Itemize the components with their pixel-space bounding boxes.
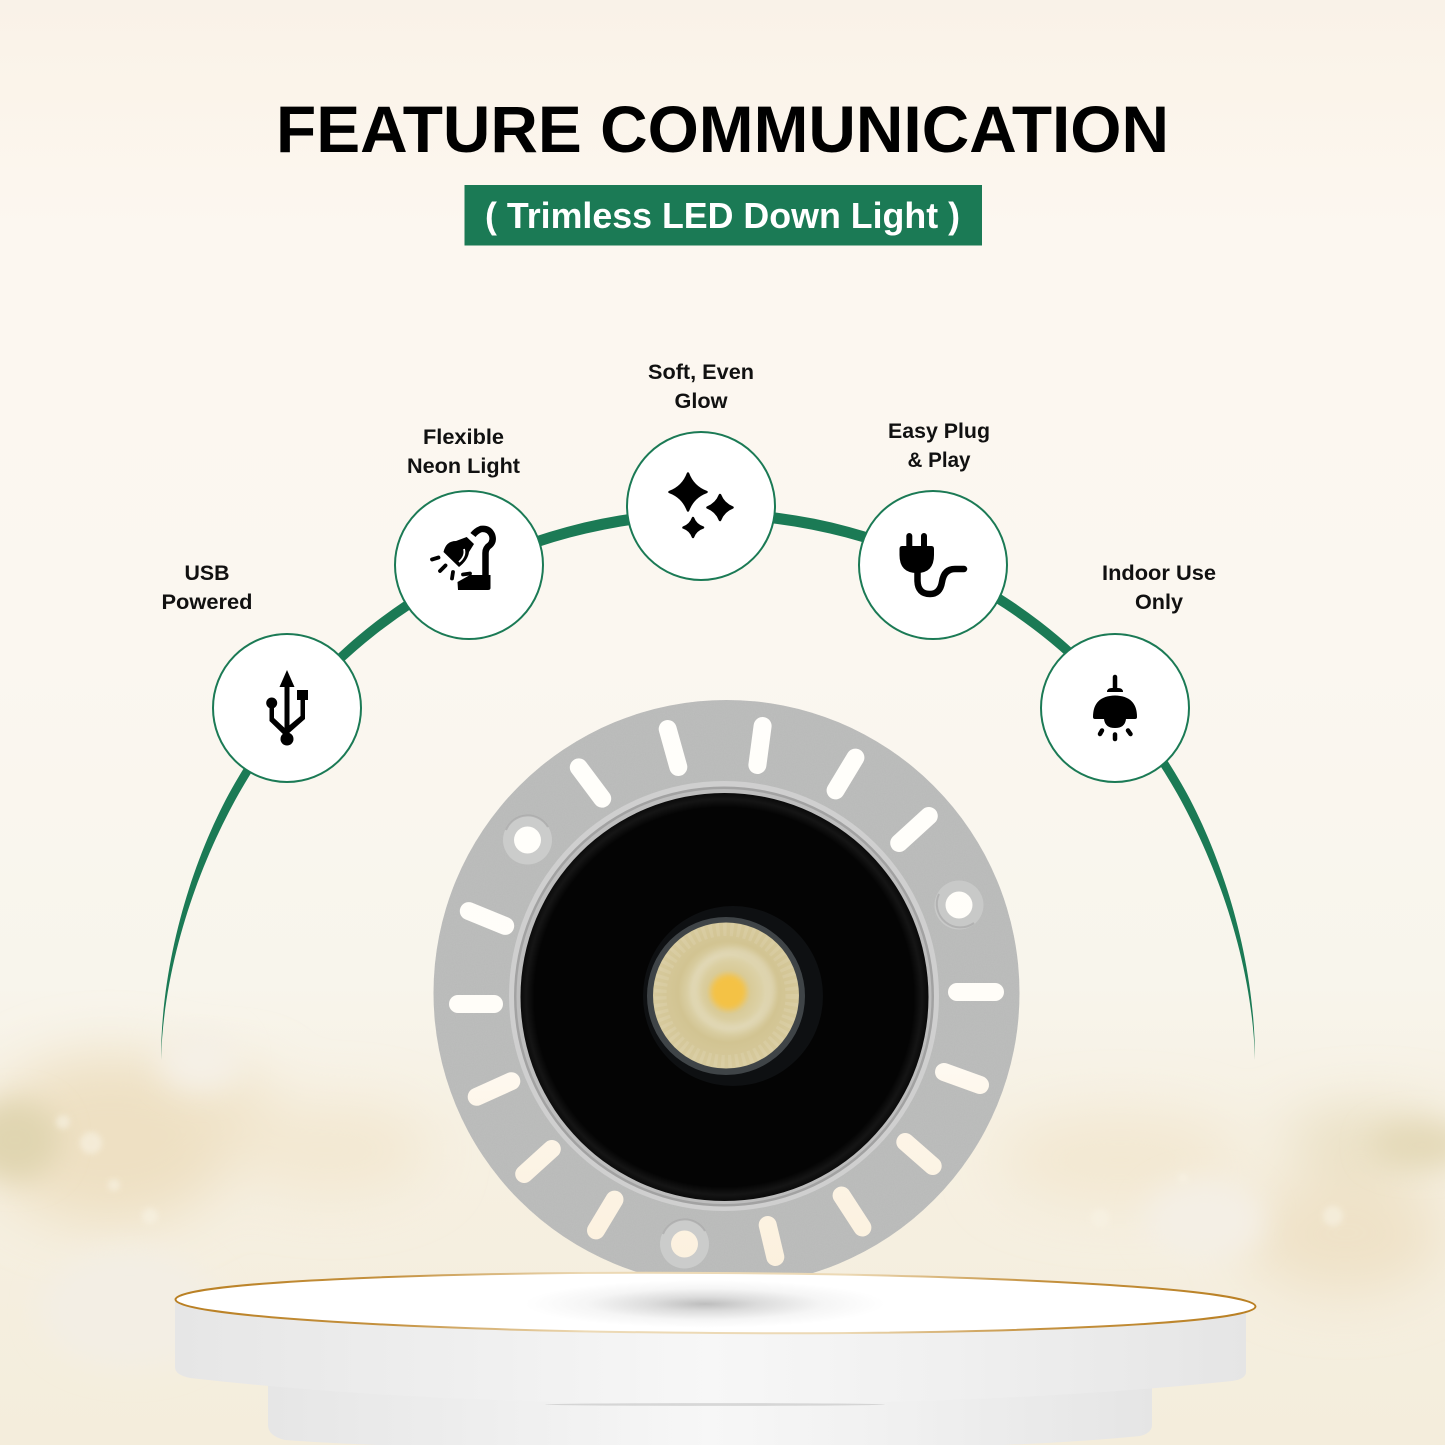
platform podium (175, 1270, 1256, 1445)
icon: pendant lamp (1093, 677, 1137, 739)
subtitle banner: ( Trimless LED Down Light ) (485, 195, 960, 236)
feature: Easy Plug and Play: & Play (908, 449, 971, 472)
feature: Soft, Even Glow: Soft, Even (648, 361, 754, 384)
contact shadow (525, 1280, 885, 1328)
feature: Flexible Neon Light (395, 426, 543, 639)
feature: Indoor Use Only: Indoor Use (1102, 562, 1216, 585)
feature: Soft, Even Glow: Glow (674, 390, 728, 413)
black reflector cup (520, 793, 928, 1201)
LED lens (653, 922, 799, 1068)
metal flange (434, 700, 1020, 1286)
lens housing (643, 906, 823, 1086)
light showing through slots (438, 705, 1014, 1281)
arc connector (161, 508, 1255, 1060)
subtitle banner (464, 185, 982, 246)
tier shadow (545, 1403, 885, 1406)
inner bevel (509, 781, 939, 1211)
icon: usb (266, 670, 308, 746)
platform top (175, 1270, 1256, 1336)
icon: sparkles (670, 474, 732, 537)
feature: USB Powered: USB (184, 562, 230, 585)
feature: Soft, Even Glow (627, 361, 775, 580)
icon: desk lamp (432, 529, 493, 590)
feature: Easy Plug and Play: Easy Plug (888, 420, 990, 443)
product: trimless LED down light (434, 700, 1020, 1286)
icon: plug (900, 536, 964, 594)
lower tier (268, 1385, 1152, 1445)
feature: Indoor Use Only: Only (1135, 591, 1183, 614)
feature: Flexible Neon Light: Flexible (423, 426, 504, 449)
feature: USB Powered (162, 562, 361, 782)
title: FEATURE COMMUNICATION (276, 92, 1169, 166)
feature: Indoor Use Only (1041, 562, 1216, 782)
feature: USB Powered: Powered (162, 591, 252, 614)
feature: Easy Plug and Play (859, 420, 1007, 639)
feature: Flexible Neon Light: Neon Light (407, 455, 520, 478)
upper tier side (175, 1300, 1246, 1404)
